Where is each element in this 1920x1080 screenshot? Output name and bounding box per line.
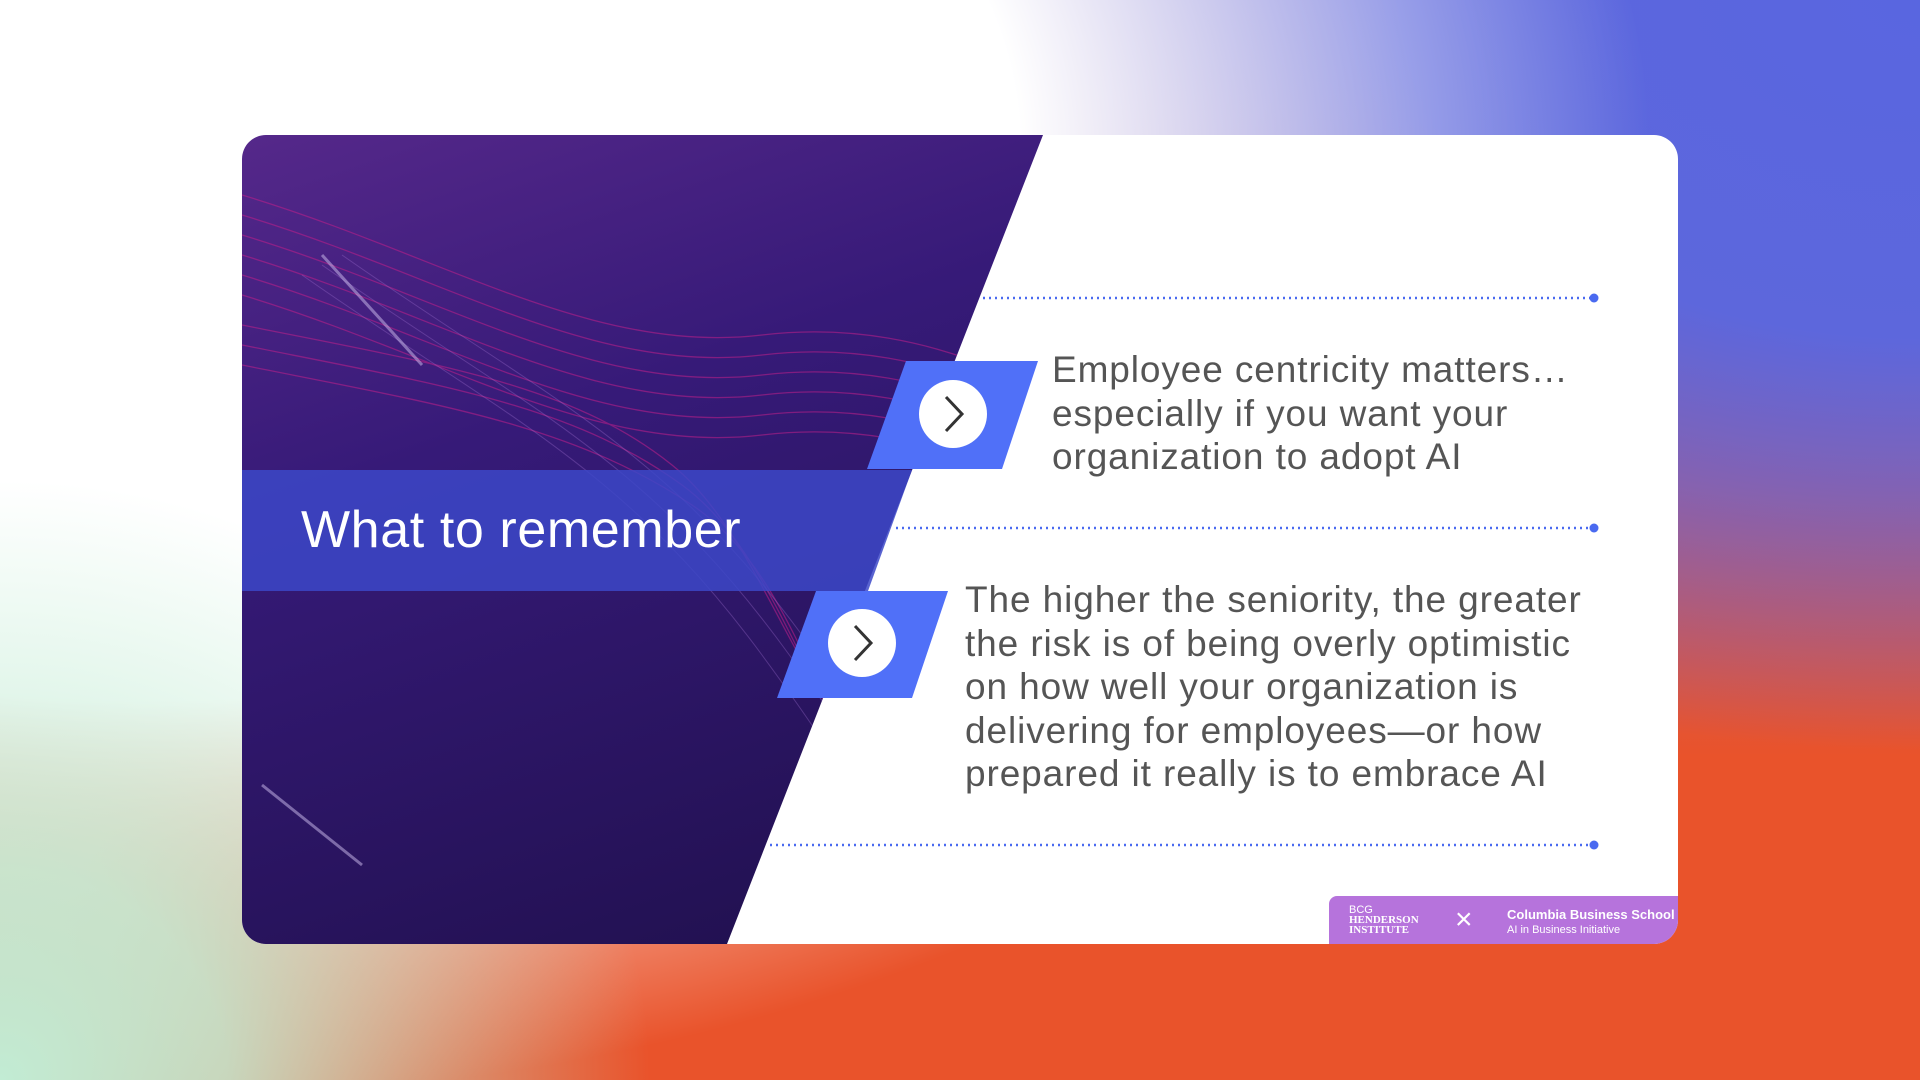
logo: Columbia Business School: Columbia Business School	[1507, 907, 1675, 922]
title band	[242, 470, 912, 591]
text block 2: the risk is of being overly optimistic	[965, 622, 1571, 664]
text block 2: prepared it really is to embrace AI	[965, 753, 1548, 794]
text block 2: delivering for employees—or how	[965, 710, 1542, 750]
logo bar: ×	[1455, 903, 1473, 936]
panel: dark purple image area	[242, 135, 1043, 944]
card	[242, 135, 1678, 944]
text block 2: The higher the seniority, the greater	[965, 579, 1582, 620]
dotted lines	[770, 294, 1598, 850]
logo: Columbia Business School: AI in Business Initiative	[1507, 924, 1620, 936]
text block 1: especially if you want your	[1052, 392, 1508, 434]
logo bar	[1329, 896, 1678, 944]
logo: BCG Henderson Institute: INSTITUTE	[1349, 924, 1409, 936]
icon: arrow 2	[777, 591, 948, 698]
text block 1: Employee centricity matters…	[1052, 349, 1569, 390]
logo: BCG Henderson Institute: BCG	[1349, 904, 1373, 916]
text block 1	[1052, 349, 1569, 477]
text block 1: organization to adopt AI	[1052, 436, 1462, 477]
logo: BCG Henderson Institute	[1349, 904, 1419, 936]
title: What to remember	[301, 501, 741, 559]
icon: arrow 1	[867, 361, 1038, 469]
logo: Columbia Business School	[1507, 907, 1675, 936]
text block 2	[965, 579, 1582, 794]
logo: BCG Henderson Institute: HENDERSON	[1349, 914, 1419, 926]
text block 2: on how well your organization is	[965, 666, 1518, 707]
